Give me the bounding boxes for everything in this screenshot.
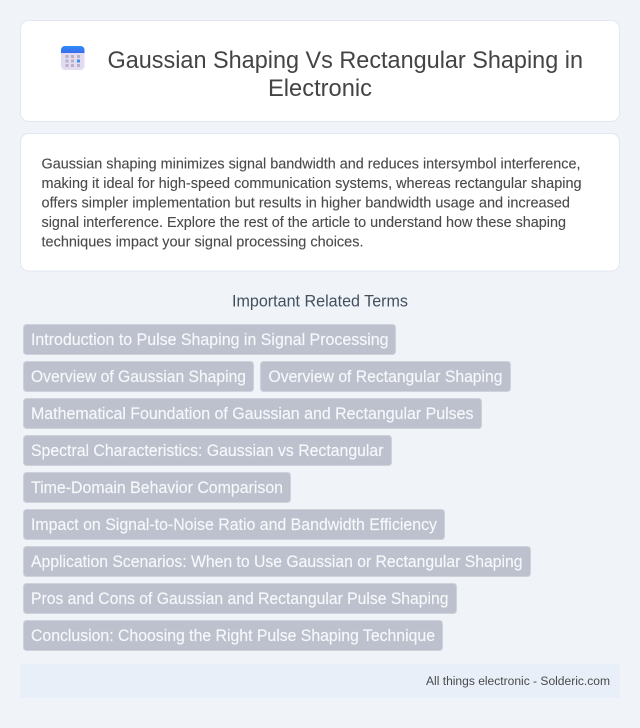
term tag: conclusion: Conclusion: Choosing the Right Pulse Shaping Technique <box>31 627 435 645</box>
panel: summary paragraph <box>20 134 620 271</box>
term tag: pros and cons <box>24 584 456 614</box>
text block: summary <box>42 156 582 250</box>
title <box>108 47 583 102</box>
term tag: spectral characteristics: Spectral Characteristics: Gaussian vs Rectangular <box>31 442 384 460</box>
term tag: gaussian overview <box>24 362 254 392</box>
title: Electronic <box>268 75 372 102</box>
text block: summary: making it ideal for high-speed communication systems, whereas rectangular shaping <box>42 176 582 192</box>
icon: calendar <box>61 46 84 70</box>
term tag: snr and bandwidth <box>24 510 444 540</box>
term tag: pros and cons: Pros and Cons of Gaussian and Rectangular Pulse Shaping <box>31 590 448 608</box>
heading: important related terms: Important Related Terms <box>232 292 408 310</box>
text block: summary: techniques impact your signal processing choices. <box>42 234 364 250</box>
term tag: conclusion <box>24 620 442 650</box>
term tag: rectangular overview <box>260 362 510 392</box>
term tag: mathematical foundation <box>24 398 482 428</box>
panel: related terms list <box>24 324 530 650</box>
term tag: introduction: Introduction to Pulse Shaping in Signal Processing <box>31 331 388 349</box>
term tag: time-domain behavior <box>24 472 290 502</box>
term tag: time-domain behavior: Time-Domain Behavior Comparison <box>31 479 283 497</box>
term tag: spectral characteristics <box>24 436 392 466</box>
text block: summary: Gaussian shaping minimizes signal bandwidth and reduces intersymbol interference, <box>42 156 580 172</box>
term tag: application scenarios <box>24 546 530 576</box>
text block: summary: offers simpler implementation but results in higher bandwidth usage and increased <box>42 195 570 211</box>
term tag: application scenarios: Application Scenarios: When to Use Gaussian or Rectangular Shaping <box>31 553 522 571</box>
term tag: mathematical foundation: Mathematical Foundation of Gaussian and Rectangular Pulses <box>31 405 474 423</box>
title: Gaussian Shaping Vs Rectangular Shaping in <box>108 47 583 74</box>
footer: All things electronic - Solderic.com <box>426 674 610 688</box>
term tag: gaussian overview: Overview of Gaussian Shaping <box>31 368 246 386</box>
term tag: snr and bandwidth: Impact on Signal-to-Noise Ratio and Bandwidth Efficiency <box>31 516 438 534</box>
panel: title card <box>20 20 620 122</box>
term tag: introduction <box>24 324 396 354</box>
footer <box>20 664 620 698</box>
text block: summary: signal interference. Explore the rest of the article to understand how these shaping <box>42 215 566 231</box>
term tag: rectangular overview: Overview of Rectangular Shaping <box>268 368 502 386</box>
